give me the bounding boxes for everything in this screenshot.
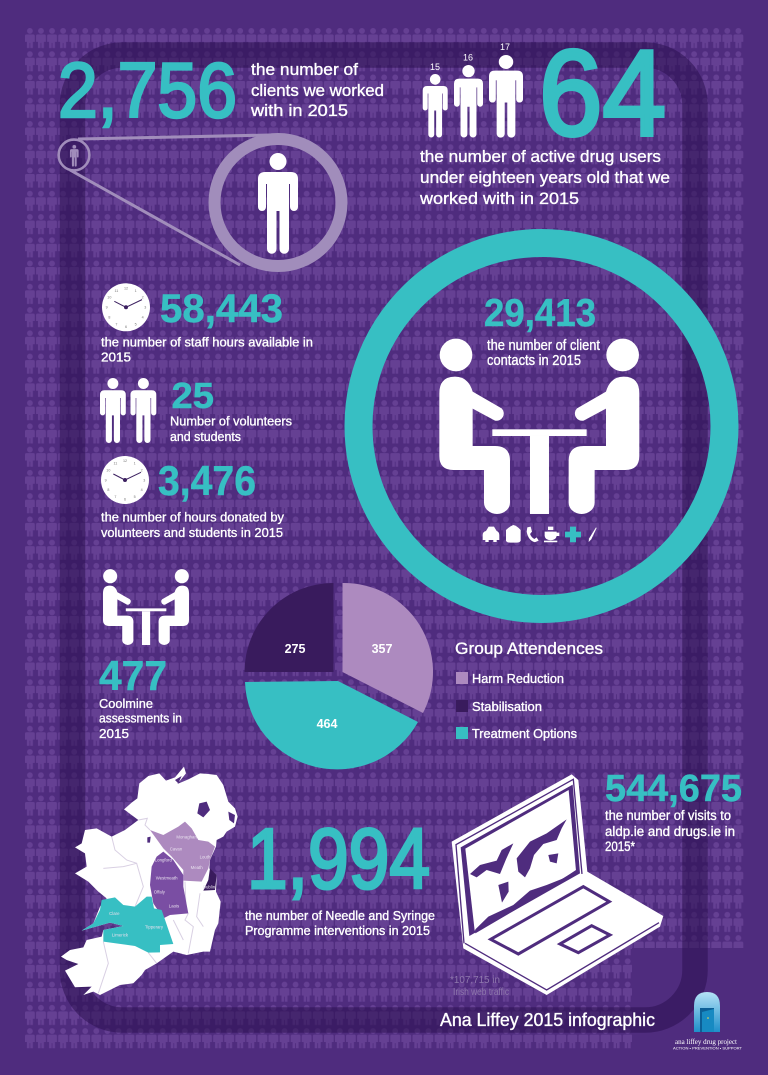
text: under eighteen description: the number of active drug users: [420, 147, 661, 166]
text: volunteers: and students: [170, 429, 241, 444]
map of Ireland: Limerick: [112, 933, 129, 938]
map of Ireland: Meath: [191, 865, 203, 870]
text: client contacts: the number of client: [487, 337, 601, 354]
icon: laptop: [452, 774, 663, 995]
text: staff hours: 2015: [101, 350, 131, 364]
legend: Group Attendences: [455, 639, 603, 658]
footnote: Irish web traffic: [453, 987, 509, 998]
icon: clock: [102, 283, 150, 331]
text: clients description: with in 2015: [250, 101, 348, 120]
text: clients description: [250, 60, 384, 120]
text: client contacts: [487, 337, 601, 369]
map of Ireland: Dublin: [203, 885, 216, 890]
map of Ireland: Westmeath: [156, 875, 178, 880]
stat: staff hours: [101, 283, 313, 364]
logo: Ana Liffey Drug Project: ACTION • PREVENTION • SUPPORT: [673, 1046, 743, 1050]
icon: clock: [101, 456, 149, 504]
text: donated hours: [101, 510, 284, 540]
legend: Stabilisation: [472, 699, 542, 714]
text: needle and syringe: Programme interventions in 2015: [245, 923, 430, 938]
text: volunteers: [170, 414, 292, 444]
text: under eighteen description: under eighteen years old that we: [420, 168, 670, 187]
stat: staff hours: 58,443: [160, 287, 283, 331]
pie chart: group attendances: 464: [317, 717, 337, 731]
text: needle and syringe: [245, 908, 435, 938]
icon: two people at table: [439, 339, 639, 514]
legend: [455, 639, 603, 741]
ring panel: client contacts: [358, 243, 724, 609]
text: web visits: aldp.ie and drugs.ie in: [605, 824, 735, 839]
footer title: Ana Liffey 2015 infographic: [440, 1010, 655, 1030]
region: Dublin: [203, 868, 217, 891]
stat: 2,756 clients: 2,756: [58, 46, 237, 134]
logo: Ana Liffey Drug Project: [673, 992, 743, 1050]
map of Ireland: [61, 767, 238, 995]
stat: volunteers: 25: [172, 375, 214, 416]
icons: contact types: [483, 525, 597, 543]
text: volunteers: Number of volunteers: [170, 414, 292, 428]
region: mid-west counties: [82, 897, 173, 953]
stat: 544,675 web visits: [605, 768, 742, 854]
stat: volunteers: [100, 375, 292, 444]
pie chart: group attendances: 275: [285, 642, 305, 656]
trackpad: [560, 926, 610, 953]
keyboard: [491, 887, 609, 954]
text: donated hours: the number of hours donated by: [101, 510, 284, 524]
logo: Ana Liffey Drug Project: ana liffey drug project: [675, 1038, 737, 1046]
text: web visits: [605, 808, 735, 854]
text: Coolmine: [99, 696, 182, 741]
stat: donated hours: 3,476: [158, 457, 256, 504]
pie chart: group attendances: 357: [372, 642, 392, 656]
text: clients description: clients we worked: [251, 81, 384, 100]
text: under eighteen description: worked with in 2015: [419, 189, 579, 208]
text: staff hours: [101, 334, 313, 364]
map of Ireland: Louth: [200, 854, 211, 859]
map of Ireland: Cavan: [170, 847, 183, 852]
icon: three figures: 15: [430, 62, 440, 72]
stat: donated hours: [101, 456, 284, 540]
text: Coolmine: assessments in: [99, 710, 182, 726]
stat: 64 under eighteen: [419, 25, 670, 208]
dark rounded frame: [72, 55, 695, 1020]
text: web visits: 2015*: [605, 839, 636, 854]
map of Ireland: Tipperary: [145, 924, 164, 929]
map of Ireland: Monaghan: [176, 835, 197, 840]
stat: 29,413: 29,413: [484, 292, 596, 335]
stat: 1,994 needle and syringe: [245, 812, 435, 938]
icon: three figures: 16: [463, 52, 473, 62]
legend: Treatment Options: [472, 726, 577, 741]
text: Coolmine: 2015: [99, 726, 129, 741]
map of Ireland: Longford: [155, 858, 172, 863]
map of Ireland: Offaly: [154, 889, 166, 894]
world map: [470, 819, 577, 933]
map of Ireland: Laois: [169, 903, 179, 908]
text: staff hours: the number of staff hours available in: [101, 334, 313, 350]
stat: 1,994 needle and syringe: 1,994: [247, 812, 430, 907]
stat: Coolmine assessments: 477: [99, 652, 167, 699]
text: needle and syringe: the number of Needle and Syringe: [245, 908, 435, 923]
footnote: *107,715 in: [450, 975, 500, 986]
text: web visits: the number of visits to: [605, 808, 731, 823]
map of Ireland: Clare: [109, 911, 120, 916]
stat: 2,756 clients: [58, 46, 384, 134]
stat: 64 under eighteen: 64: [539, 25, 666, 161]
text: Coolmine: Coolmine: [99, 696, 153, 711]
icon: three figures: 17: [500, 42, 510, 52]
footnote: [450, 975, 509, 998]
magnifier callout: [59, 135, 341, 266]
pie chart: group attendances: [244, 583, 433, 769]
stat: Coolmine assessments: [99, 569, 189, 741]
text: donated hours: volunteers and students in 2015: [101, 525, 283, 540]
icon: two figures: [100, 378, 156, 443]
region: midland counties: [150, 852, 188, 918]
region: north-east counties: [150, 822, 215, 882]
icon: three figures: [423, 42, 523, 138]
text: clients description: the number of: [251, 60, 358, 79]
legend: Harm Reduction: [472, 671, 564, 686]
text: client contacts: contacts in 2015: [487, 352, 581, 369]
icon: two people at table: [103, 569, 189, 645]
text: under eighteen description: [419, 147, 670, 208]
stat: 544,675 web visits: 544,675: [605, 768, 742, 810]
